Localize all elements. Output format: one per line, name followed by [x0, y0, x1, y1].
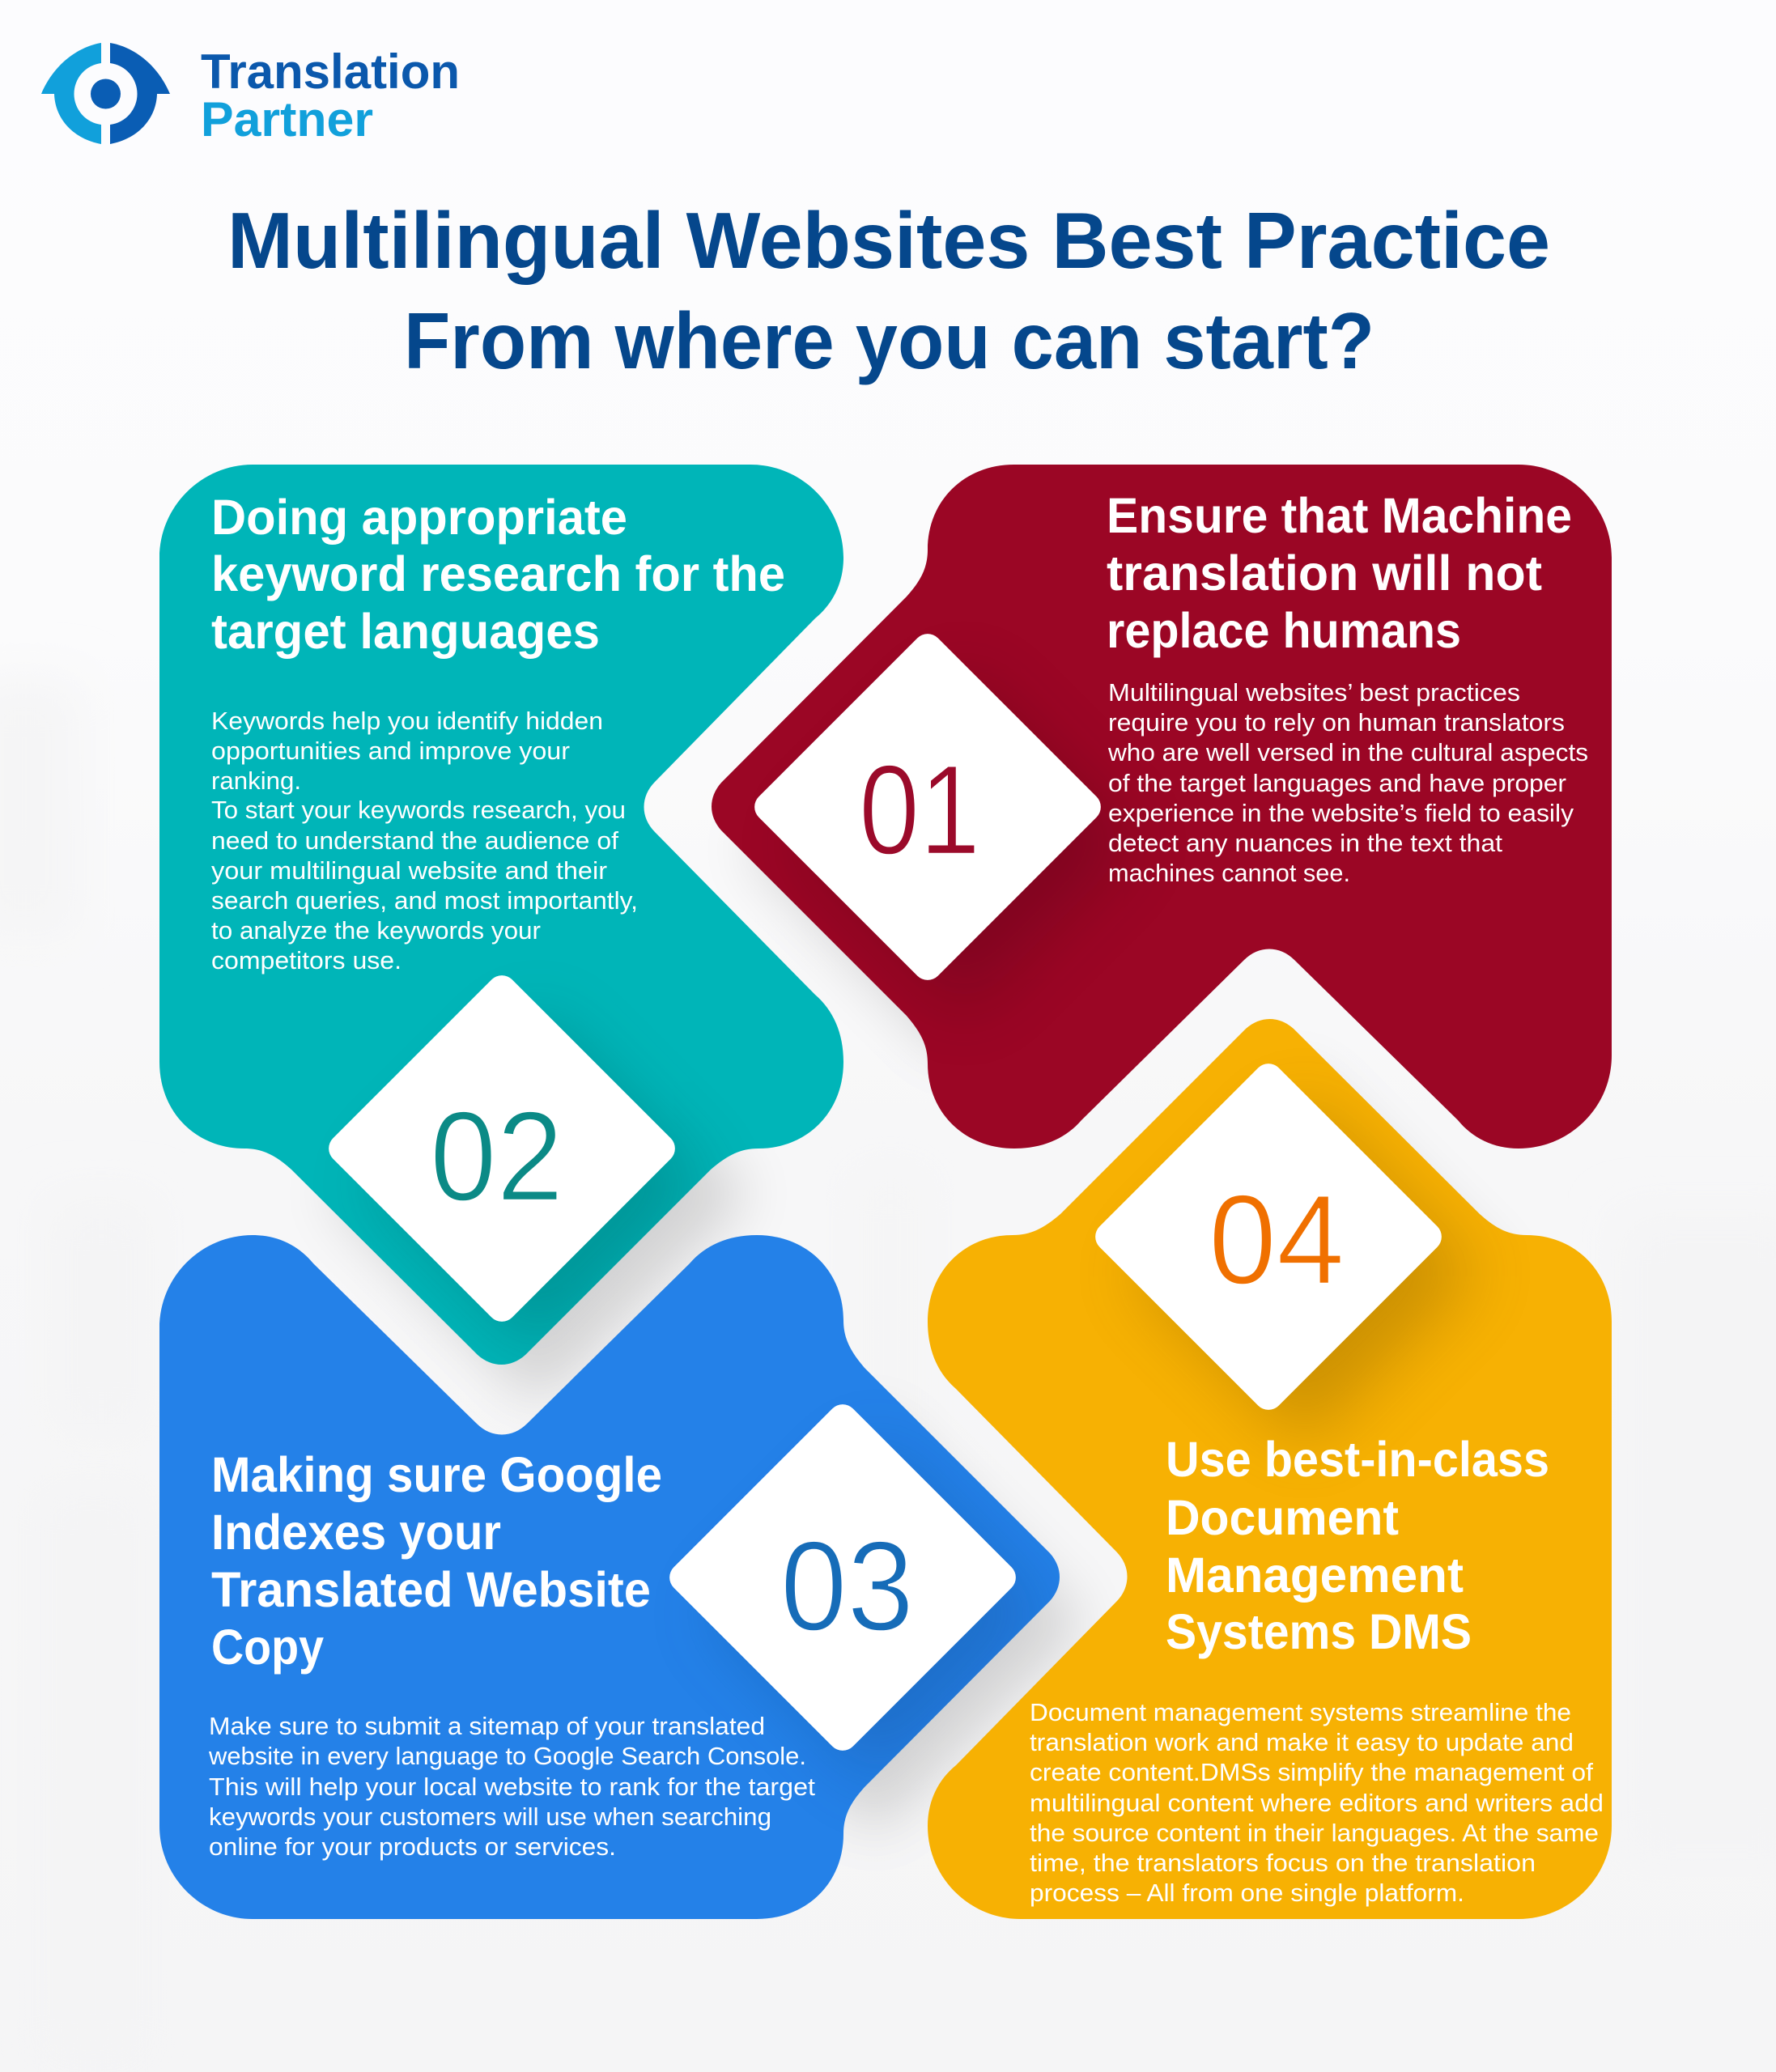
title — [227, 196, 1550, 385]
heading: Indexes your — [211, 1505, 501, 1560]
diamond badge 01 — [749, 628, 1107, 986]
yellow panel shape — [928, 1019, 1612, 1919]
heading — [1166, 1432, 1549, 1659]
heading: Document — [1166, 1490, 1399, 1545]
body text: translation work and make it easy to update and — [1030, 1728, 1574, 1756]
body text: to analyze the keywords your — [211, 916, 541, 945]
heading — [1107, 488, 1572, 658]
heading: translation will not — [1107, 546, 1542, 601]
diamond badge 03: 03 — [780, 1515, 914, 1658]
body text: keywords your customers will use when searching — [209, 1802, 771, 1831]
body text: ranking. — [211, 766, 301, 795]
title: From where you can start? — [404, 296, 1374, 385]
body text: To start your keywords research, you — [211, 796, 626, 824]
logo wordmark: Partner — [201, 92, 373, 146]
diamond badge 04 — [1090, 1058, 1447, 1416]
body text: machines cannot see. — [1108, 859, 1350, 887]
diamond badge 03 — [664, 1399, 1022, 1756]
body text — [1030, 1698, 1604, 1907]
logo wordmark — [201, 45, 460, 146]
heading: Translated Website — [211, 1562, 651, 1617]
heading — [211, 490, 785, 659]
diamond badge 01: 01 — [859, 739, 980, 881]
outer soft shadows of the tabs — [328, 639, 1507, 1833]
diamond badge 02: 02 — [430, 1085, 563, 1228]
heading: Systems DMS — [1166, 1604, 1472, 1659]
body text: competitors use. — [211, 946, 402, 974]
body text: multilingual content where editors and writers add — [1030, 1789, 1604, 1817]
heading: Making sure Google — [211, 1447, 662, 1502]
body text: opportunities and improve your — [211, 737, 570, 765]
body text: of the target languages and have proper — [1108, 769, 1566, 797]
body text: need to understand the audience of — [211, 826, 618, 855]
body text: This will help your local website to rank for the target — [209, 1773, 815, 1801]
body text: detect any nuances in the text that — [1108, 829, 1502, 857]
heading: Use best-in-class — [1166, 1432, 1549, 1487]
body text: Make sure to submit a sitemap of your translated — [209, 1712, 765, 1740]
heading: target languages — [211, 604, 600, 659]
body text: experience in the website’s field to easily — [1108, 799, 1574, 827]
panel: 04 document management — [928, 1019, 1612, 1919]
logo wordmark: Translation — [201, 45, 460, 99]
panel: 03 google indexing — [159, 1235, 1060, 1919]
body text: online for your products or services. — [209, 1832, 616, 1861]
logo — [41, 43, 460, 146]
body text: require you to rely on human translators — [1108, 708, 1565, 737]
body text: website in every language to Google Search Console. — [208, 1742, 806, 1770]
body text: search queries, and most importantly, — [211, 886, 638, 915]
diamond shadow — [706, 1441, 1052, 1787]
heading — [211, 1447, 662, 1675]
body text: Keywords help you identify hidden — [211, 707, 603, 735]
title: Multilingual Websites Best Practice — [227, 196, 1550, 285]
blue panel shape — [159, 1235, 1060, 1919]
heading: replace humans — [1107, 603, 1461, 658]
teal panel shape — [159, 465, 843, 1365]
heading: Ensure that Machine — [1107, 488, 1572, 543]
diamond badge 04: 04 — [1209, 1169, 1345, 1311]
heading: Copy — [211, 1620, 324, 1675]
icon: arrow eye mark — [41, 43, 170, 144]
body text: process – All from one single platform. — [1030, 1879, 1464, 1907]
diamond shadow — [803, 682, 1128, 1007]
body text: Multilingual websites’ best practices — [1108, 678, 1520, 707]
panel: 02 keyword research — [159, 465, 843, 1365]
heading: keyword research for the — [211, 546, 785, 601]
red panel shape — [712, 465, 1612, 1149]
heading: Management — [1166, 1548, 1464, 1603]
body text — [208, 1712, 815, 1861]
panel: 01 machine translation — [712, 465, 1612, 1149]
body text: Document management systems streamline the — [1030, 1698, 1571, 1726]
body text: the source content in their languages. At the same — [1030, 1819, 1599, 1847]
body text — [1107, 678, 1588, 887]
diamond shadow — [1132, 1100, 1478, 1446]
heading: Doing appropriate — [211, 490, 627, 545]
body text — [211, 707, 638, 974]
diamond shadow — [365, 1012, 712, 1358]
diamond badge 02 — [323, 970, 681, 1327]
body text: who are well versed in the cultural aspects — [1107, 738, 1588, 766]
body text: time, the translators focus on the translation — [1030, 1849, 1536, 1877]
body text: your multilingual website and their — [211, 856, 607, 885]
body text: create content.DMSs simplify the management of — [1030, 1758, 1593, 1786]
